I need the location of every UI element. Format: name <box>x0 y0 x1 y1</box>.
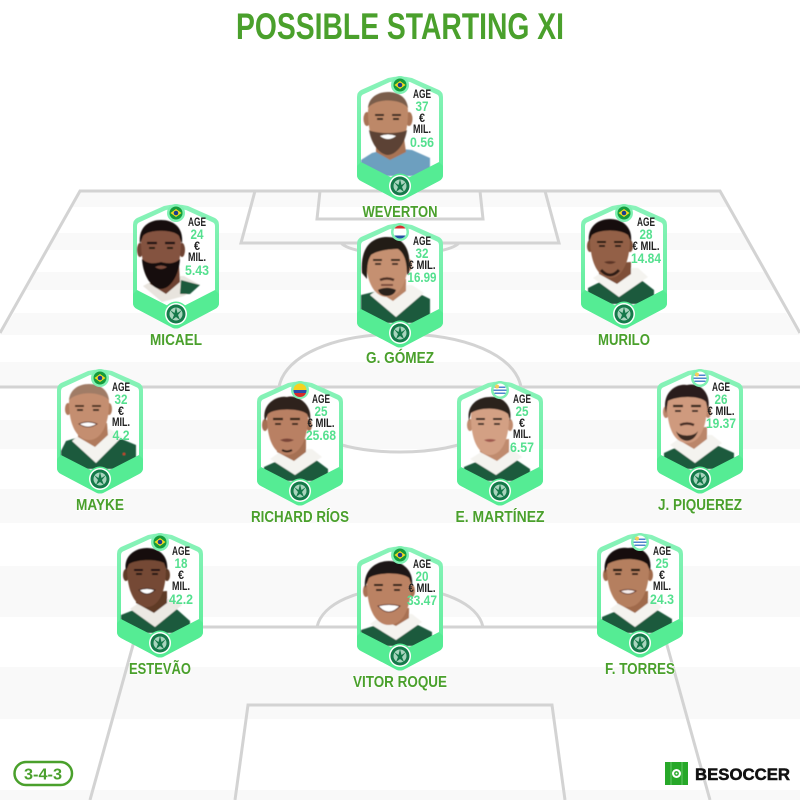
name: Vitor Roque: VITOR ROQUE <box>353 674 447 691</box>
icon: pitch square <box>665 762 688 785</box>
stats: age and value: € <box>659 570 666 582</box>
player card: Micael <box>133 204 219 349</box>
stats: age and value <box>169 546 193 607</box>
flag: Uruguay <box>634 536 646 548</box>
stats: age and value: € MIL. <box>708 406 734 418</box>
stats: age and value: AGE <box>172 546 190 558</box>
player card: E. Martínez <box>456 381 545 526</box>
stats: age and value <box>407 559 437 608</box>
stats: age and value: MIL. <box>172 581 190 593</box>
stats: age and value: AGE <box>413 236 431 248</box>
stats: age and value: AGE <box>513 394 531 406</box>
name: Weverton: WEVERTON <box>362 204 438 221</box>
stats: age and value: 6.57 <box>510 440 534 455</box>
flag: Brazil <box>618 206 630 220</box>
name: Micael: MICAEL <box>150 332 202 349</box>
stats: age and value: 25 <box>516 404 529 419</box>
flag: Brazil <box>94 372 106 384</box>
name: Estevão: ESTEVÃO <box>129 658 191 678</box>
player photo: Mayke <box>61 384 136 469</box>
stats: age and value: 16.99 <box>408 270 436 285</box>
stats: age and value: 28 <box>640 227 653 242</box>
player photo: Murilo <box>587 219 654 304</box>
player card: Weverton <box>357 76 443 221</box>
stats: age and value: € MIL. <box>308 418 334 430</box>
flag: Paraguay <box>394 225 406 239</box>
name: Richard Ríos: RICHARD RÍOS <box>251 507 349 526</box>
stats: age and value: 14.84 <box>631 251 661 266</box>
stats: age and value: 24 <box>190 227 204 242</box>
stats: age and value: 37 <box>416 99 428 114</box>
stats: age and value: € <box>419 113 426 125</box>
player photo: F. Torres <box>602 548 672 633</box>
stats: age and value: AGE <box>653 546 671 558</box>
formation badge <box>14 762 72 785</box>
name: Murilo: MURILO <box>598 332 650 349</box>
player card: Estevão <box>117 533 203 678</box>
player photo: Weverton <box>361 92 430 176</box>
stats: age and value: € MIL. <box>632 241 660 253</box>
stats: age and value: 5.43 <box>185 263 209 278</box>
stats: age and value: MIL. <box>112 417 130 429</box>
stats: age and value <box>650 546 674 607</box>
stats: age and value <box>410 89 434 150</box>
stats: age and value: 4.2 <box>112 428 130 443</box>
flag: Brazil <box>394 78 406 92</box>
name: G. Gómez: G. GÓMEZ <box>366 348 434 367</box>
stats: age and value: MIL. <box>188 252 206 264</box>
flag: Brazil <box>170 206 182 220</box>
stats: age and value: AGE <box>712 382 730 394</box>
stats: age and value: 33.47 <box>407 593 437 608</box>
stats: age and value <box>185 217 209 278</box>
name: Mayke: MAYKE <box>76 497 124 514</box>
stats: age and value: 18 <box>174 556 188 571</box>
stats: age and value <box>510 394 534 455</box>
player card: Gómez <box>357 223 443 367</box>
stats: age and value: € <box>118 406 125 418</box>
player photo: E. Martínez <box>464 397 530 481</box>
stats: age and value: 25 <box>314 404 328 419</box>
stats: age and value <box>112 382 130 443</box>
stats: age and value: € <box>194 241 201 253</box>
stats: age and value: MIL. <box>513 429 531 441</box>
flag: Brazil <box>394 548 406 562</box>
player photo: Gómez <box>361 237 430 323</box>
title: POSSIBLE STARTING XI <box>236 6 564 47</box>
player photo: Micael <box>137 220 200 302</box>
stats: age and value: AGE <box>413 559 431 571</box>
stats: age and value: 32 <box>114 392 128 407</box>
stats: age and value: € <box>178 570 185 582</box>
name: J. Piquerez: J. PIQUEREZ <box>658 497 742 514</box>
stats: age and value: 42.2 <box>169 592 193 607</box>
stats: age and value <box>306 394 336 443</box>
player card: Vitor Roque <box>353 546 447 691</box>
player photo: Richard Ríos <box>262 397 328 481</box>
flag: Colombia <box>293 384 307 397</box>
stats: age and value: 25.68 <box>306 428 336 443</box>
stats: age and value <box>631 217 661 266</box>
player card: Murilo <box>581 204 667 349</box>
stats: age and value: MIL. <box>413 124 431 136</box>
stats: age and value: € <box>519 418 526 430</box>
stats: age and value: € MIL. <box>408 260 436 272</box>
stats: age and value: 24.3 <box>650 592 674 607</box>
player card: F. Torres <box>597 533 683 678</box>
stats: age and value: 0.56 <box>410 135 434 150</box>
player photo: J. Piquerez <box>663 385 734 469</box>
player card: Mayke <box>57 369 143 514</box>
stats: age and value <box>706 382 736 431</box>
player card: Richard Ríos <box>251 381 349 526</box>
pitch background stripes <box>0 192 800 800</box>
wordmark: BESOCCER <box>695 765 790 784</box>
player card: J. Piquerez <box>657 369 743 514</box>
stats: age and value: € MIL. <box>408 583 436 595</box>
flag: Brazil <box>154 536 166 548</box>
stats: age and value: AGE <box>188 217 206 229</box>
stats: age and value: 26 <box>714 392 728 407</box>
stats: age and value <box>408 236 436 285</box>
stats: age and value: AGE <box>112 382 130 394</box>
flag: Uruguay <box>494 384 506 396</box>
stats: age and value: 20 <box>416 569 428 584</box>
BeSoccer logo <box>665 762 790 785</box>
stats: age and value: AGE <box>312 394 330 406</box>
player photo: Vitor Roque <box>361 561 432 646</box>
player photo: Estevão <box>121 548 190 633</box>
stats: age and value: 32 <box>416 246 428 261</box>
pitch lines <box>0 191 800 800</box>
name: F. Torres: F. TORRES <box>605 661 675 678</box>
name: E. Martínez: E. MARTÍNEZ <box>456 507 545 526</box>
flag: Uruguay <box>694 372 706 384</box>
stats: age and value: AGE <box>413 89 431 101</box>
formation badge: 3-4-3 <box>24 766 62 784</box>
stats: age and value: 19.37 <box>706 416 736 431</box>
stats: age and value: AGE <box>637 217 655 229</box>
stats: age and value: 25 <box>656 556 669 571</box>
stats: age and value: MIL. <box>653 581 671 593</box>
